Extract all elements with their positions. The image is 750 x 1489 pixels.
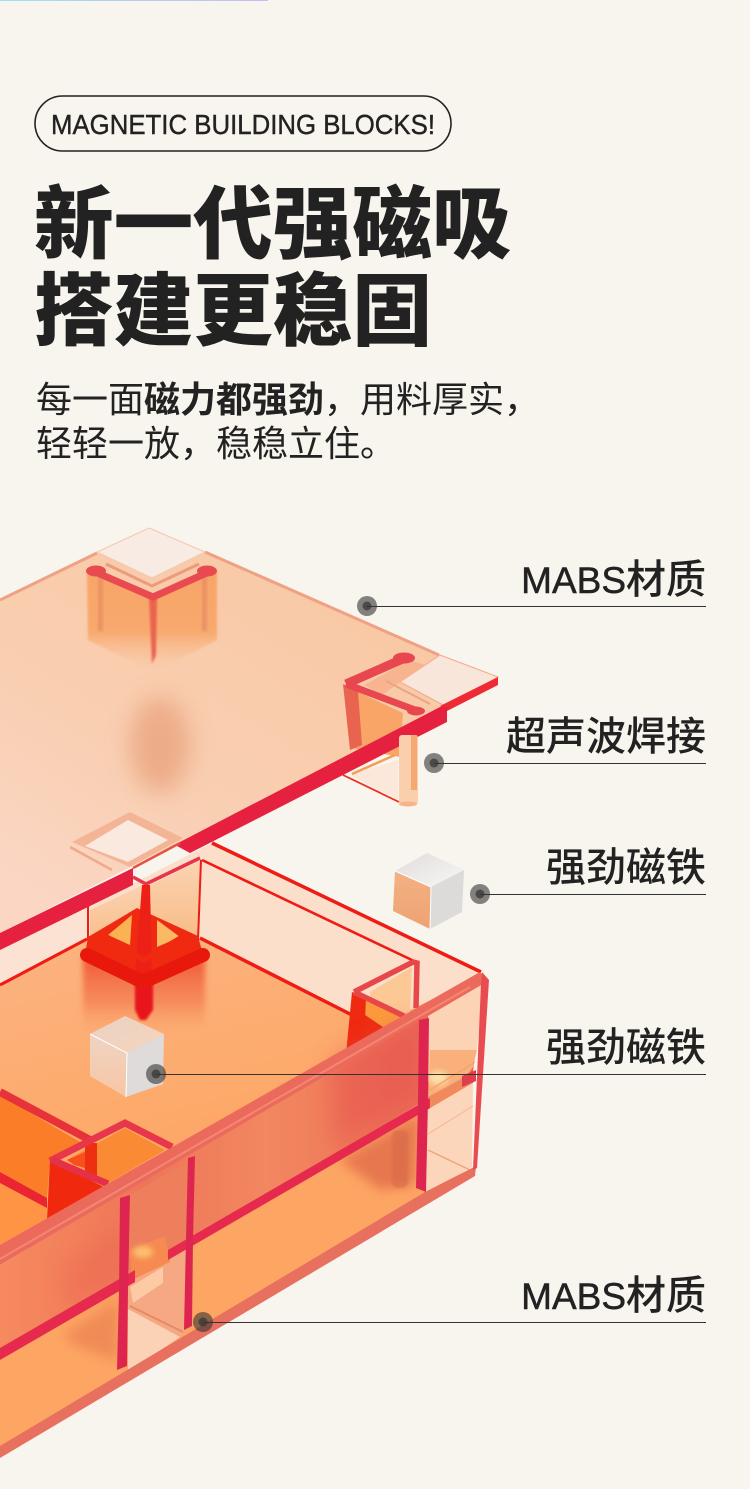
box floor [0, 939, 481, 1250]
right tab [400, 655, 498, 707]
plate surface [0, 552, 447, 933]
back wall lines [0, 858, 414, 1015]
subtitle text: 轻轻一放，稳稳立住。 [36, 423, 396, 464]
tag pill [35, 96, 451, 151]
subtitle text: 每一面磁力都强劲，用料厚实， [36, 379, 540, 420]
front wall lower [0, 1104, 432, 1448]
wall shadows [60, 1015, 425, 1362]
title: 新一代强磁吸 [34, 180, 512, 269]
callout: MABS材质 top [357, 558, 706, 616]
box rim top surface [0, 843, 481, 1250]
blurred post shadow [130, 697, 190, 793]
callout: 强劲磁铁 lower: 强劲磁铁 [546, 1026, 706, 1070]
mid red line [0, 1070, 476, 1360]
right corner window [425, 983, 483, 1195]
bottom notch [70, 812, 183, 870]
top leg [86, 564, 217, 672]
post below plate [343, 735, 418, 806]
callout: 超声波焊接: 超声波焊接 [506, 715, 706, 759]
callout: 强劲磁铁 upper [470, 846, 706, 904]
title [34, 180, 512, 356]
magnetic block box, lower half [0, 843, 489, 1458]
plate red front edge [177, 707, 447, 853]
vertical red ribs [117, 1018, 429, 1370]
icon: upper magnet cube [393, 853, 464, 929]
front wall upper [0, 983, 483, 1352]
subtitle text [36, 379, 540, 464]
top notch [97, 528, 205, 578]
icon: lower magnet cube [90, 1016, 164, 1097]
top plate [0, 528, 498, 950]
right leg [343, 652, 430, 757]
callout: MABS材质 bottom: MABS材质 [521, 1274, 706, 1318]
callout: 强劲磁铁 lower [146, 1026, 706, 1084]
title: 搭建更稳固 [34, 267, 432, 356]
callout: 超声波焊接 [424, 715, 706, 773]
callout: MABS材质 bottom [193, 1274, 706, 1332]
middle window [128, 1162, 188, 1372]
bottom rim [0, 1166, 476, 1458]
far corner magnet post [83, 885, 205, 1035]
plate back rim [0, 552, 439, 655]
top front rim [0, 972, 488, 1265]
callout: MABS材质 top: MABS材质 [521, 558, 706, 602]
tag pill: MAGNETIC BUILDING BLOCKS! [51, 109, 435, 140]
back wall panes [0, 861, 200, 985]
front left corner post and dark floor [0, 1092, 172, 1245]
right edge [473, 972, 489, 1170]
right corner post [346, 962, 417, 1054]
callout: 强劲磁铁 upper: 强劲磁铁 [546, 846, 706, 890]
far outer rim line [212, 843, 481, 972]
